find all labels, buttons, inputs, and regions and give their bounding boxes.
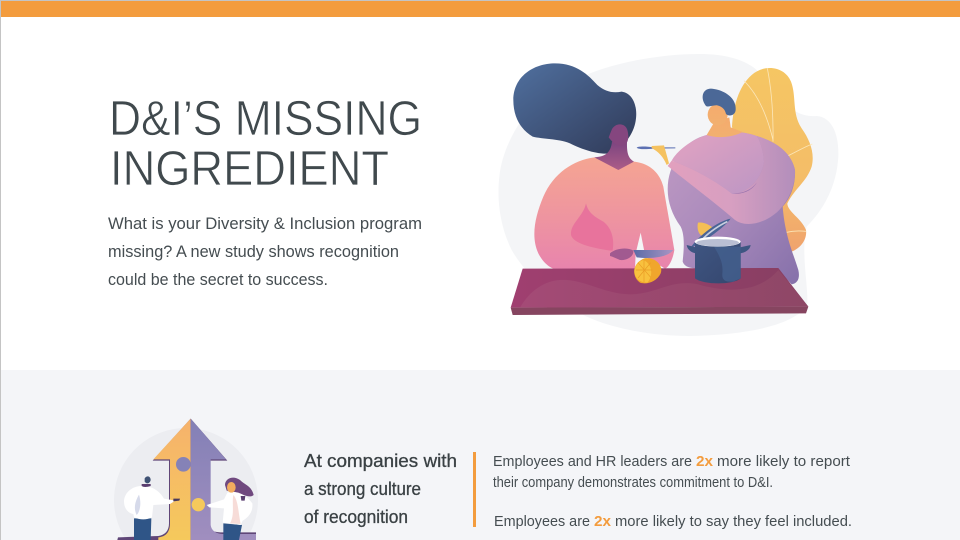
- man: [668, 89, 799, 284]
- section heading: a strong culture: [304, 479, 421, 499]
- stat: commitment to D&I: [493, 453, 851, 491]
- background blob: [498, 54, 838, 336]
- cooking pot: [687, 219, 751, 283]
- torso and lower body: [668, 132, 799, 284]
- plant: [732, 68, 813, 252]
- section heading: of recognition: [304, 507, 408, 527]
- illustration: puzzle arrow and two colleagues: [114, 419, 258, 540]
- section heading: At companies with: [304, 451, 457, 471]
- stat: commitment to D&I: Employees and HR leaders are: [493, 453, 692, 470]
- orange vertical divider: [473, 452, 476, 527]
- intro text: missing? A new study shows recognition: [108, 242, 399, 261]
- stat: feeling included: [494, 513, 852, 530]
- hand and knife: [610, 249, 673, 260]
- intro text: What is your Diversity & Inclusion program: [108, 214, 422, 233]
- illustration: two people cooking: [498, 54, 838, 336]
- stat: feeling included: more likely to say they feel included.: [615, 513, 852, 530]
- woman: [513, 63, 674, 269]
- title: D&I’S MISSING: [109, 92, 422, 146]
- stat: commitment to D&I: 2x: [696, 453, 714, 470]
- arrow outline shadow: [117, 419, 256, 540]
- lower section background: [1, 370, 960, 540]
- puzzle knob purple: [176, 457, 191, 472]
- woman figure: [207, 478, 254, 540]
- section heading: [304, 451, 457, 527]
- right half of arrow: [191, 419, 256, 540]
- stat: feeling included: 2x: [594, 513, 612, 530]
- intro text: [108, 214, 422, 289]
- table: [511, 268, 808, 315]
- stat: commitment to D&I: more likely to report: [717, 453, 851, 470]
- stat: feeling included: Employees are: [494, 513, 590, 530]
- spoon: [637, 145, 675, 165]
- lemon: [634, 258, 661, 283]
- backdrop circle: [114, 428, 258, 540]
- man figure: [124, 476, 180, 540]
- sleeve and forearm: [668, 136, 795, 224]
- title: INGREDIENT: [110, 142, 389, 196]
- left half of arrow: [153, 419, 191, 540]
- puzzle knob yellow: [192, 498, 205, 511]
- top orange banner: [1, 1, 960, 17]
- chest: [672, 132, 764, 194]
- statistics text: [493, 453, 852, 530]
- stat: commitment to D&I: their company demonstrates commitment to D&I.: [493, 474, 773, 491]
- intro text: could be the secret to success.: [108, 270, 328, 289]
- title: [109, 92, 422, 196]
